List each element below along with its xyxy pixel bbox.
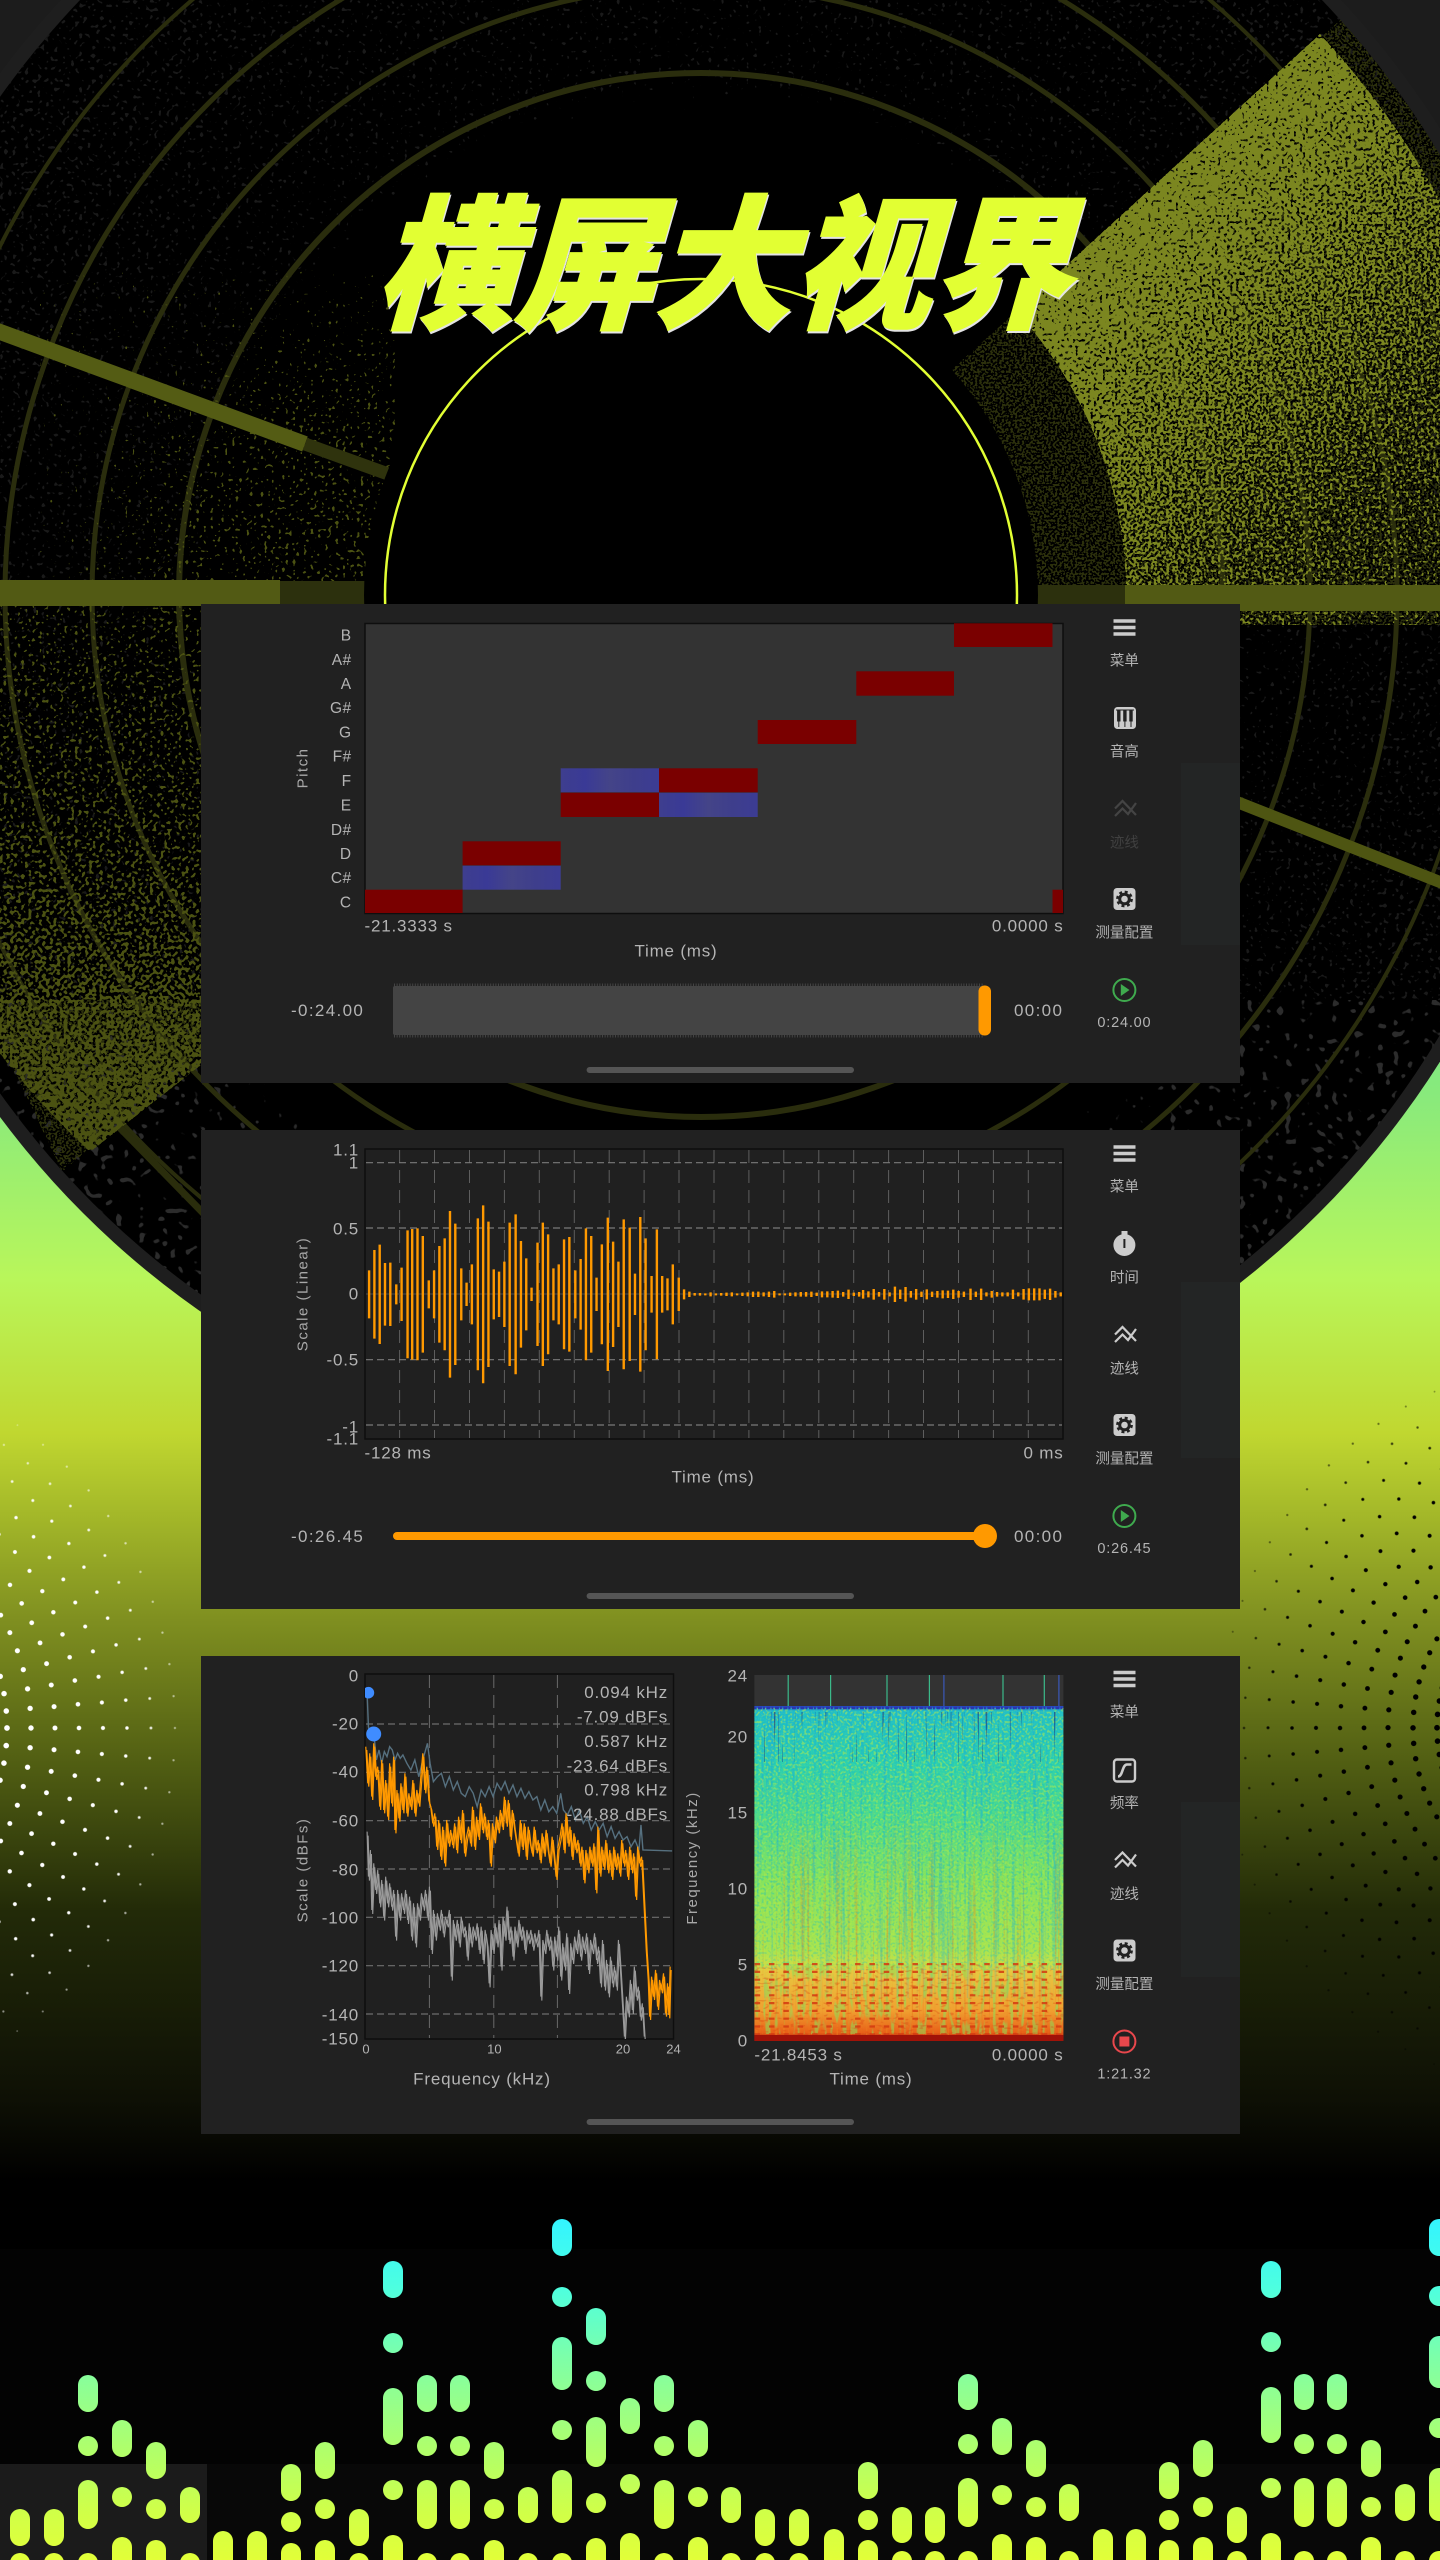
orange slider (291, 1524, 1063, 1548)
pitch axis labels: B (341, 628, 352, 644)
playback waveform slider (291, 985, 1063, 1036)
toolbar: 菜单 (1110, 1178, 1139, 1196)
icon: measure settings (1114, 1940, 1136, 1962)
spectrum axis labels: -20 (332, 1714, 359, 1734)
pitch axis labels: C (340, 894, 352, 912)
home indicator (587, 1067, 854, 1073)
icon: trace dim (1115, 801, 1136, 816)
spectrogram axis labels: 5 (738, 1956, 748, 1974)
toolbar: 迹线 (1110, 1886, 1139, 1903)
pitch axis labels: G (339, 724, 352, 742)
pitch axis labels (294, 628, 1064, 960)
panel background (201, 604, 1240, 1083)
toolbar: 频率 (1110, 1795, 1139, 1812)
spectrogram axis labels: 20 (727, 1728, 748, 1746)
icon: stop (1113, 2030, 1135, 2052)
oscilloscope axis labels: -0.5 (326, 1350, 359, 1370)
spectrum axis labels: -80 (332, 1860, 359, 1880)
spectrum axis labels: 24 (666, 2042, 681, 2056)
pitch plot (365, 623, 1063, 914)
spectrogram axis labels: Time (ms) (829, 2070, 913, 2088)
peak readouts: -24.88 dBFs (567, 1805, 668, 1824)
spectrum axis labels: -140 (322, 2006, 359, 2024)
toolbar: 迹线 (1110, 1360, 1139, 1378)
spectrogram axis labels: 15 (727, 1804, 748, 1822)
toolbar: 测量配置 (1095, 1976, 1153, 1993)
spectrum axis labels: -100 (322, 1908, 359, 1928)
oscilloscope axis labels: 0 (349, 1284, 359, 1304)
peak readouts: 0.094 kHz (584, 1683, 668, 1702)
peak readouts: -23.64 dBFs (567, 1756, 668, 1776)
peak readouts (567, 1683, 668, 1824)
peak readouts: -7.09 dBFs (577, 1708, 668, 1726)
spectrum axis labels: 0 (362, 2042, 370, 2056)
pitch axis labels: F# (333, 748, 352, 766)
orange waveform (369, 1205, 1061, 1383)
pitch axis labels: 0.0000 s (992, 916, 1064, 936)
blue peak markers (365, 1686, 374, 1698)
equalizer bars (20, 2229, 1439, 2560)
spectrogram axis labels: 10 (727, 1880, 748, 1898)
spectrum axis labels: -150 (322, 2030, 359, 2048)
panel background (201, 1130, 1240, 1609)
icon: measure settings (1114, 888, 1136, 910)
bottom faint blocks (0, 2249, 1440, 2560)
oscilloscope axis labels: 0.5 (333, 1220, 359, 1238)
pitch axis labels: G# (330, 700, 352, 717)
toolbar (1095, 1147, 1153, 1557)
pitch axis labels: Time (ms) (634, 942, 718, 960)
toolbar: 测量配置 (1095, 924, 1153, 942)
spectrum axis labels: Scale (dBFs) (294, 1818, 312, 1922)
spectrogram (754, 1675, 1063, 2041)
pitch axis labels: A (341, 676, 352, 693)
olive stippled wedge, upper right (952, 20, 1440, 625)
panel: spectrum and spectrogram (201, 1656, 1240, 2134)
spectrum axis labels: 0 (349, 1666, 359, 1686)
oscilloscope axis labels: 1 (349, 1154, 359, 1172)
orange slider: 00:00 (1014, 1527, 1063, 1546)
olive stippled wedge, lower left (0, 270, 395, 1172)
pitch axis labels: Pitch (294, 748, 312, 788)
black centre circle (364, 258, 1038, 932)
peak readouts: 0.587 kHz (584, 1732, 668, 1751)
toolbar: 测量配置 (1095, 1450, 1153, 1468)
sidebar shade (1181, 1802, 1240, 1977)
icon: menu (1114, 1147, 1136, 1160)
olive diagonal and horizontal stripes (0, 330, 1440, 1215)
icon: menu (1114, 1672, 1136, 1686)
spectrogram axis labels: 0 (738, 2032, 748, 2050)
toolbar: 时间 (1110, 1270, 1139, 1286)
pitch axis labels: -21.3333 s (364, 916, 453, 936)
spectrum axis labels: 10 (487, 2042, 502, 2056)
spectrum axis labels: -40 (332, 1762, 359, 1782)
blue peak trace (367, 1693, 672, 1851)
toolbar: 菜单 (1110, 652, 1139, 670)
playback waveform slider: -0:24.00 (291, 1001, 364, 1020)
icon: stopwatch (1113, 1231, 1135, 1256)
oscilloscope axis labels: -128 ms (364, 1444, 432, 1462)
large black disc with grey rim (0, 0, 1440, 1469)
orange spectrum trace (366, 1743, 671, 2020)
oscilloscope axis labels (294, 1140, 1064, 1486)
spectrum axis labels (294, 1666, 681, 2088)
home indicator (587, 1593, 854, 1599)
icon: play (1113, 1505, 1135, 1527)
pitch axis labels: F (342, 773, 352, 790)
oscilloscope axis labels: Time (ms) (671, 1468, 755, 1486)
halftone white dot sphere, left (0, 1424, 176, 2032)
playback waveform slider: 00:00 (1014, 1001, 1063, 1020)
panel background (201, 1656, 1240, 2134)
grey noise floor trace (367, 1832, 645, 2041)
home indicator (587, 2119, 854, 2125)
spectrogram axis labels: 0.0000 s (992, 2046, 1064, 2064)
pitch axis labels: A# (332, 652, 352, 669)
toolbar: 1:21.32 (1097, 2066, 1151, 2082)
toolbar: 菜单 (1110, 1704, 1139, 1721)
toolbar: 0:26.45 (1097, 1541, 1151, 1557)
icon: piano (1114, 707, 1136, 729)
orange slider: -0:26.45 (291, 1527, 364, 1546)
yellow ring (385, 279, 1017, 911)
spectrum axis labels: -60 (332, 1812, 359, 1830)
sidebar shade (1181, 763, 1240, 945)
title: 横屏大视界 (365, 186, 1106, 348)
pitch axis labels: D (340, 846, 352, 863)
toolbar (1095, 1672, 1153, 2082)
oscilloscope axis labels: 0 ms (1023, 1444, 1064, 1462)
toolbar: 迹线 (1110, 834, 1139, 852)
panel: oscilloscope (201, 1130, 1240, 1609)
oscilloscope axis labels: -1 (342, 1418, 359, 1436)
spectrum axis labels: Frequency (kHz) (413, 2070, 551, 2088)
spectrogram axis labels (684, 1666, 1064, 2088)
spectrum axis labels: 20 (616, 2042, 630, 2056)
icon: play (1113, 979, 1135, 1001)
panel: pitch (201, 604, 1240, 1083)
oscilloscope plot (365, 1149, 1063, 1439)
spectrogram axis labels: Frequency (kHz) (684, 1791, 701, 1925)
pitch axis labels: C# (331, 870, 352, 887)
icon: menu (1114, 621, 1136, 634)
sidebar shade (1181, 1282, 1240, 1458)
toolbar: 0:24.00 (1097, 1015, 1151, 1031)
spectrum axis labels: -120 (322, 1956, 359, 1976)
pitch axis labels: E (341, 798, 352, 814)
icon: measure settings (1114, 1414, 1136, 1436)
icon: trace (1115, 1852, 1136, 1868)
oscilloscope axis labels: 1.1 (333, 1140, 359, 1160)
pitch axis labels: D# (331, 822, 352, 839)
oscilloscope axis labels: -1.1 (326, 1430, 359, 1448)
spectrogram axis labels: -21.8453 s (754, 2046, 843, 2064)
grey stipple on disc (0, 0, 1440, 1292)
toolbar (1095, 621, 1153, 1031)
oscilloscope axis labels: Scale (Linear) (294, 1237, 312, 1351)
spectrogram axis labels: 24 (727, 1666, 748, 1686)
halftone black dot sphere, right (1232, 1390, 1440, 2050)
peak readouts: 0.798 kHz (584, 1780, 668, 1800)
FFT spectrum chart (363, 1674, 674, 2041)
icon: frequency (1114, 1760, 1135, 1782)
concentric olive rings (0, 0, 1440, 1200)
icon: trace (1115, 1327, 1136, 1342)
toolbar: 音高 (1110, 744, 1139, 760)
